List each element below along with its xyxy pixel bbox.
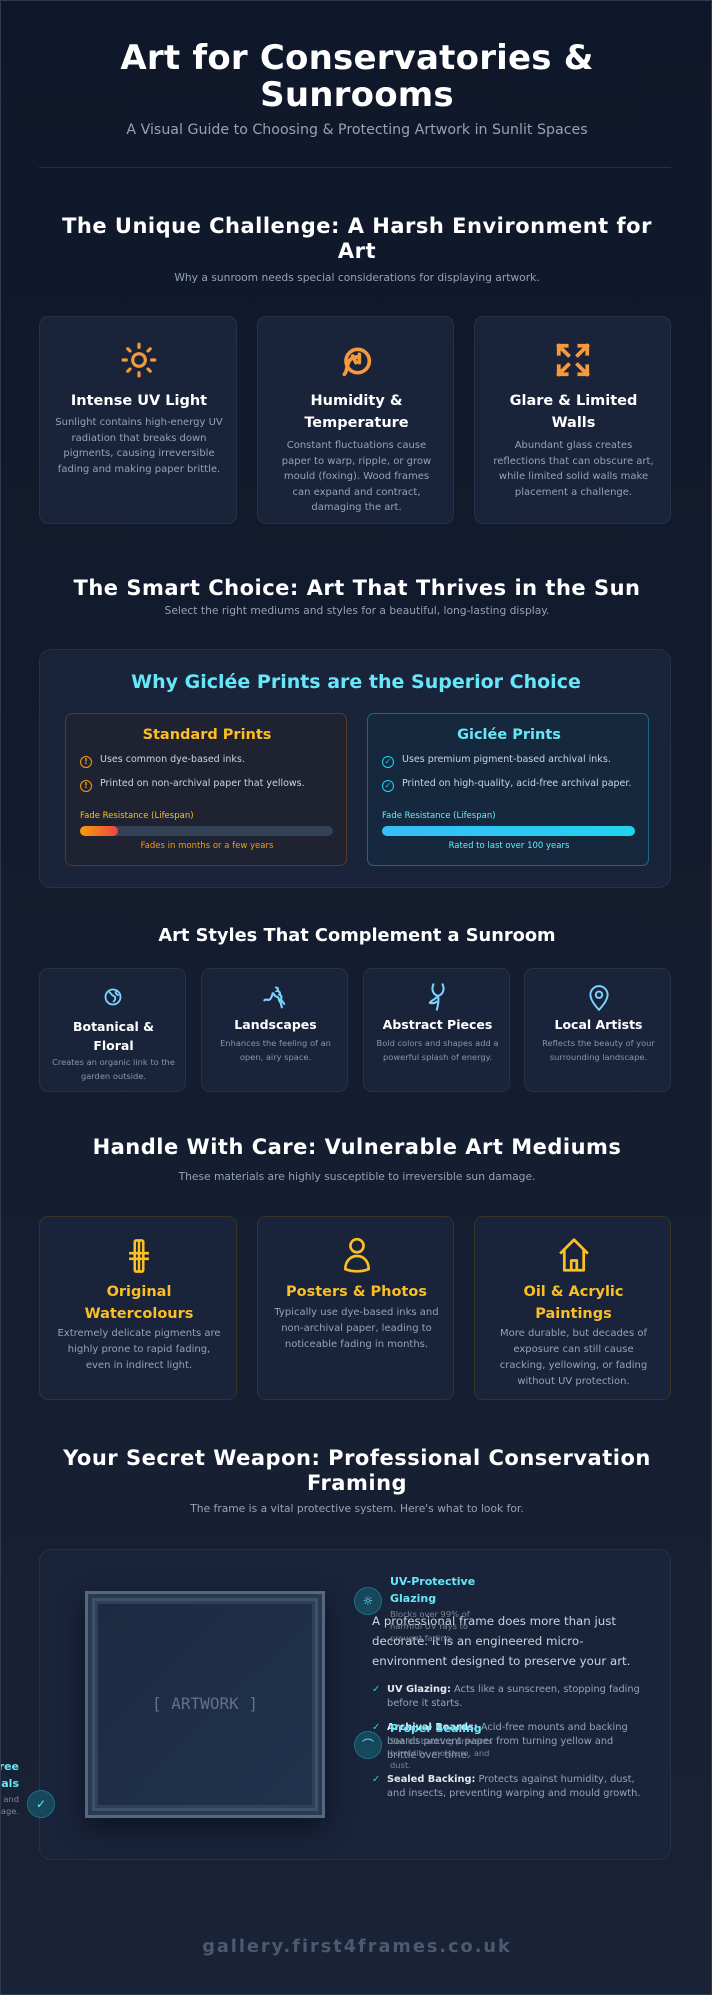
hotspot: proper sealing: ⌒: [362, 1738, 374, 1752]
bar: fade resistance standard: [80, 826, 333, 836]
frame illustration: [85, 1591, 325, 1818]
icon: brush: [129, 1239, 149, 1273]
section subtitle: secret weapon: The frame is a vital protective system. Here's what to look for.: [190, 1502, 524, 1515]
footer: website: gallery.first4frames.co.uk: [202, 1937, 512, 1957]
section subtitle: smart choice: Select the right mediums and styles for a beautiful, long-lasting display.: [165, 604, 549, 617]
section heading: unique challenge: The Unique Challenge: A Harsh Environment for: [62, 214, 652, 238]
panel: conservation framing: Proper Sealing: [390, 1722, 482, 1735]
hotspot: uv glazing: Blocks over 99% of harmful UV rays to prevent fading.: [390, 1609, 470, 1643]
subcard title: Giclée Prints: [457, 727, 561, 743]
hotspot: proper sealing: Sealed backing prevents humidity, moisture, and dust.: [390, 1736, 492, 1770]
card: humidity: [257, 316, 454, 524]
text: Enhances the feeling of an open, airy space.: [220, 1038, 331, 1062]
card: watercolours: [39, 1216, 237, 1400]
item: Uses common dye-based inks.: [100, 754, 245, 765]
checklist: ✓: [372, 1722, 380, 1733]
section heading: secret weapon: [63, 1446, 651, 1495]
title: [73, 1019, 154, 1053]
title: Landscapes: [234, 1017, 317, 1032]
item: !: [84, 781, 88, 790]
hotspot: acid-free materials: [0, 1760, 55, 1818]
text: Bold colors and shapes add a powerful splash of energy.: [377, 1038, 498, 1062]
icon: person: [344, 1238, 370, 1273]
card title: Walls: [552, 415, 595, 431]
checklist: Archival Boards: Acid-free mounts and backing boards prevent paper from turning yellow and brittle over time.: [387, 1722, 628, 1761]
card text: Constant fluctuations cause paper to warp, ripple, or grow mould (foxing). Wood frames can expand and contract, damaging the art.: [282, 440, 431, 513]
icon: location pin: [589, 985, 609, 1012]
card text: Sunlight contains high-energy UV radiation that breaks down pigments, causing irreversible fading and making paper brittle.: [55, 417, 223, 474]
card title: [304, 393, 409, 431]
panel: conservation framing: UV-Protective: [390, 1575, 475, 1588]
hotspot: uv glazing: [354, 1575, 475, 1643]
caption: Fades in months or a few years: [141, 841, 273, 851]
card title: [510, 393, 637, 431]
card text: Extremely delicate pigments are highly prone to rapid fading, even in indirect light.: [57, 1328, 221, 1371]
bar: fade resistance giclee: [382, 826, 635, 836]
hotspot: uv glazing: ☼: [363, 1594, 373, 1608]
heading: art styles: Art Styles That Complement a Sunroom: [158, 925, 556, 946]
card title: Oil & Acrylic: [524, 1284, 623, 1300]
icon: leaf globe: [104, 988, 122, 1006]
card: posters: [257, 1216, 454, 1400]
icon: expand arrows: [556, 343, 590, 377]
subcard title: Standard Prints: [143, 727, 271, 743]
title: Abstract Pieces: [383, 1017, 492, 1032]
icon: path: [263, 986, 286, 1008]
checklist: ✓: [372, 1684, 380, 1695]
card title: Intense UV Light: [71, 393, 207, 409]
title: Sunrooms: [260, 75, 454, 115]
item: ✓: [385, 781, 391, 790]
card: abstract: [363, 968, 510, 1092]
card: botanical: [39, 968, 186, 1092]
item: Printed on non-archival paper that yellows.: [100, 778, 305, 789]
checklist: UV Glazing: Acts like a sunscreen, stopping fading before it starts.: [387, 1684, 640, 1709]
artwork label: [ ARTWORK ]: [152, 1694, 258, 1713]
item: Printed on high-quality, acid-free archival paper.: [402, 778, 631, 789]
title: Botanical &: [73, 1019, 154, 1034]
subcard: standard prints: [65, 713, 347, 866]
item: Uses premium pigment-based archival inks.: [402, 754, 611, 765]
card text: Typically use dye-based inks and non-archival paper, leading to noticeable fading in months.: [274, 1307, 439, 1350]
section heading: smart choice: The Smart Choice: Art That Thrives in the Sun: [74, 576, 640, 600]
section heading: unique challenge: Art: [338, 239, 376, 263]
section heading: secret weapon: Framing: [307, 1471, 407, 1495]
text: Reflects the beauty of your surrounding landscape.: [542, 1038, 655, 1062]
hotspot: uv glazing: Glazing: [390, 1592, 436, 1605]
title: Art for Conservatories &: [120, 38, 594, 78]
card: oil acrylic: [474, 1216, 671, 1400]
card: glare: [474, 316, 671, 524]
card title: Temperature: [304, 415, 409, 431]
card title: [524, 1284, 623, 1322]
card: landscapes: [201, 968, 348, 1092]
section heading: secret weapon: Your Secret Weapon: Professional Conservation: [63, 1446, 651, 1470]
section subtitle: unique challenge: Why a sunroom needs special considerations for displaying artwork.: [174, 271, 540, 284]
section heading: handle with care: Handle With Care: Vulnerable Art Mediums: [93, 1135, 621, 1159]
subtitle: A Visual Guide to Choosing & Protecting Artwork in Sunlit Spaces: [126, 122, 588, 138]
caption: Rated to last over 100 years: [449, 841, 569, 851]
icon: house: [559, 1238, 589, 1272]
fade label: Fade Resistance (Lifespan): [80, 811, 194, 821]
checklist: Sealed Backing: Protects against humidity, dust, and insects, preventing warping and mould growth.: [387, 1774, 640, 1799]
text: Creates an organic link to the garden outside.: [52, 1057, 175, 1081]
card: local artists: [524, 968, 671, 1092]
card text: More durable, but decades of exposure can still cause cracking, yellowing, or fading without UV protection.: [500, 1328, 647, 1387]
title: [120, 38, 594, 115]
panel title: Why Giclée Prints are the Superior Choice: [131, 671, 581, 693]
card: intense uv light: [39, 316, 237, 524]
card title: Paintings: [535, 1306, 612, 1322]
icon: sun: [122, 342, 156, 378]
checklist: [372, 1684, 640, 1799]
fade label: Fade Resistance (Lifespan): [382, 811, 496, 821]
panel: conservation framing: [39, 1549, 671, 1860]
intro paragraph: A professional frame does more than just decorate. It is an engineered micro-environment designed to preserve your art.: [372, 1614, 630, 1668]
card title: Humidity &: [311, 393, 402, 409]
icon: droplet: [342, 348, 372, 376]
checklist: ✓: [372, 1774, 380, 1785]
section subtitle: handle with care: These materials are highly susceptible to irreversible sun damage.: [179, 1170, 535, 1183]
subcard: giclee prints: [367, 713, 649, 866]
card title: Watercolours: [85, 1306, 193, 1322]
card title: Posters & Photos: [286, 1284, 427, 1300]
panel: giclee comparison: [39, 649, 671, 888]
item: ✓: [385, 757, 391, 766]
title: Floral: [93, 1038, 134, 1053]
title: Local Artists: [554, 1017, 642, 1032]
card text: Abundant glass creates reflections that can obscure art, while limited solid walls make placement a challenge.: [493, 440, 654, 498]
card title: Original: [107, 1284, 171, 1300]
icon: abstract curve: [428, 983, 445, 1011]
section heading: unique challenge: [62, 214, 652, 263]
hotspot: acid-free materials: ✓: [36, 1797, 46, 1811]
item: [80, 754, 245, 768]
item: !: [84, 757, 88, 766]
hotspot: proper sealing: [354, 1722, 492, 1770]
card title: [85, 1284, 193, 1322]
card title: Glare & Limited: [510, 393, 637, 409]
